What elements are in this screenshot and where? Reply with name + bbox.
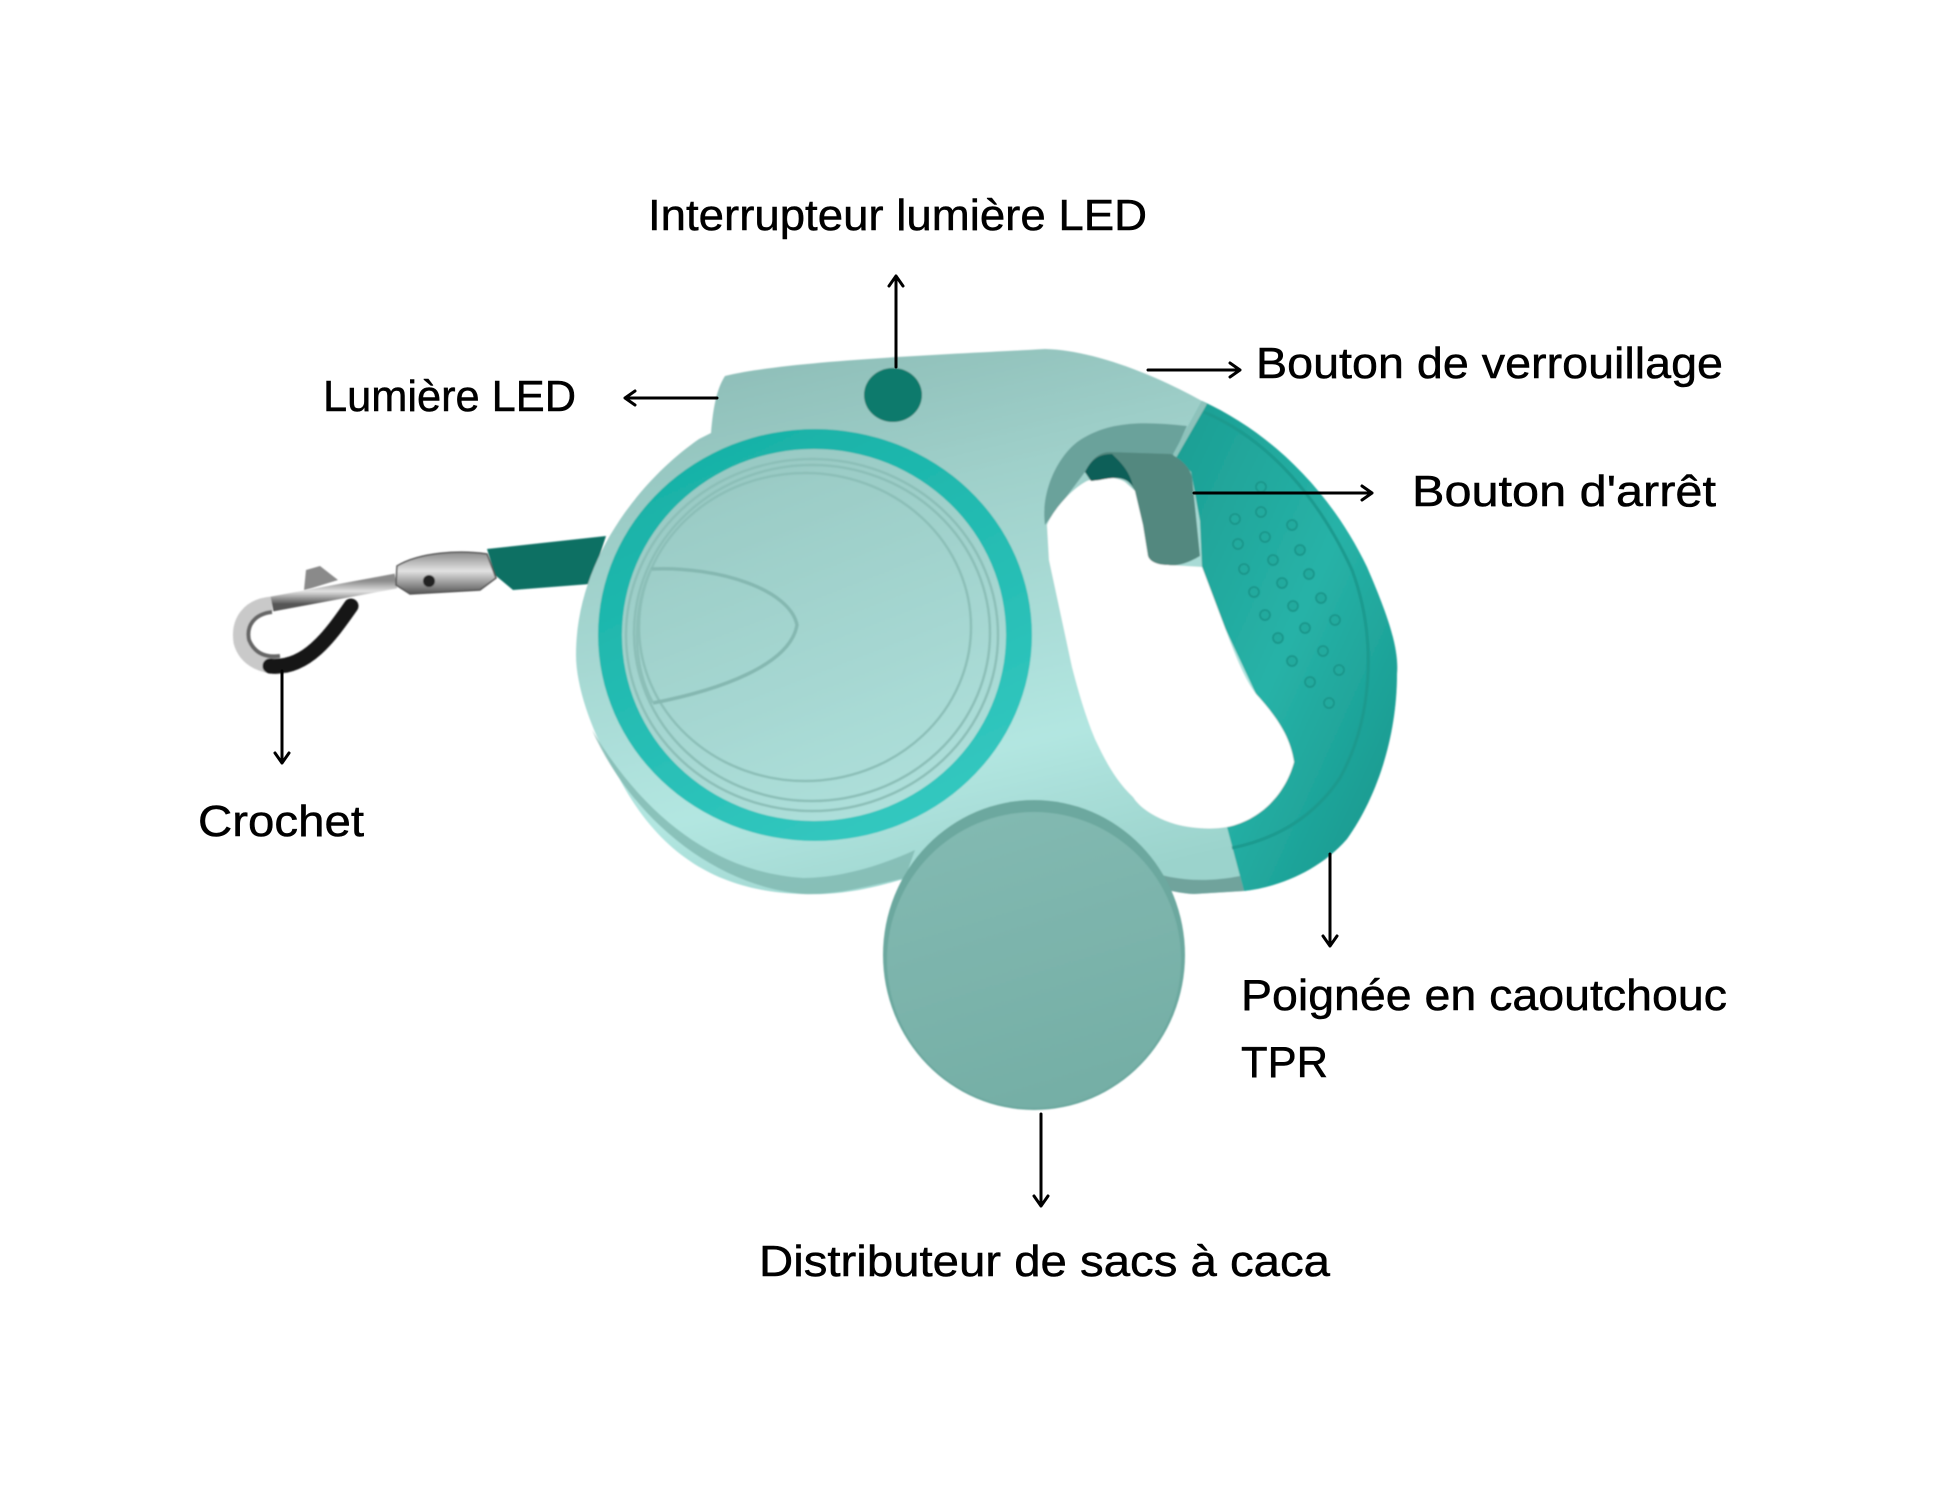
reel cover xyxy=(622,449,1006,821)
label: stop button xyxy=(1194,467,1716,516)
label: TPR rubber grip: TPR xyxy=(1241,1038,1328,1087)
arrow: LED switch xyxy=(889,276,903,367)
arrow: LED light xyxy=(625,391,717,405)
label: lock button: Bouton de verrouillage xyxy=(1256,339,1723,388)
retractable leash product xyxy=(240,349,1397,1110)
teal ring xyxy=(598,429,1032,841)
arrow: rubber grip xyxy=(1323,854,1337,946)
label: bag dispenser xyxy=(759,1114,1331,1286)
label: TPR rubber grip: Poignée en caoutchouc xyxy=(1241,971,1727,1020)
cover grooves xyxy=(626,459,998,811)
metal snap hook xyxy=(240,552,496,666)
arrow: bag dispenser xyxy=(1034,1114,1048,1206)
poop bag dispenser xyxy=(883,800,1185,1110)
arrow: lock button xyxy=(1148,363,1240,377)
hole upper shadow xyxy=(1044,423,1187,525)
label: LED light: Lumière LED xyxy=(323,372,576,421)
handle body xyxy=(576,349,1397,894)
label: LED light xyxy=(323,372,717,421)
leash sleeve xyxy=(487,536,606,590)
grip dots xyxy=(1230,482,1344,708)
handle opening xyxy=(1047,478,1294,828)
stop button dark end xyxy=(1085,454,1133,486)
arrow: stop button xyxy=(1194,486,1372,500)
label: bag dispenser: Distributeur de sacs à caca xyxy=(759,1237,1331,1286)
shaded lower rim xyxy=(592,730,915,894)
label: hook xyxy=(198,671,364,846)
label: TPR rubber grip xyxy=(1241,854,1727,1087)
stop button xyxy=(1085,452,1200,565)
shaded rim right xyxy=(1130,862,1244,894)
rubber handle grip xyxy=(1173,401,1397,891)
label: stop button: Bouton d'arrêt xyxy=(1412,467,1716,516)
LED light switch xyxy=(864,368,922,422)
arrow: hook xyxy=(275,671,289,763)
label: LED switch: Interrupteur lumière LED xyxy=(648,191,1147,240)
label: hook: Crochet xyxy=(198,797,364,846)
label: LED switch xyxy=(648,191,1147,367)
